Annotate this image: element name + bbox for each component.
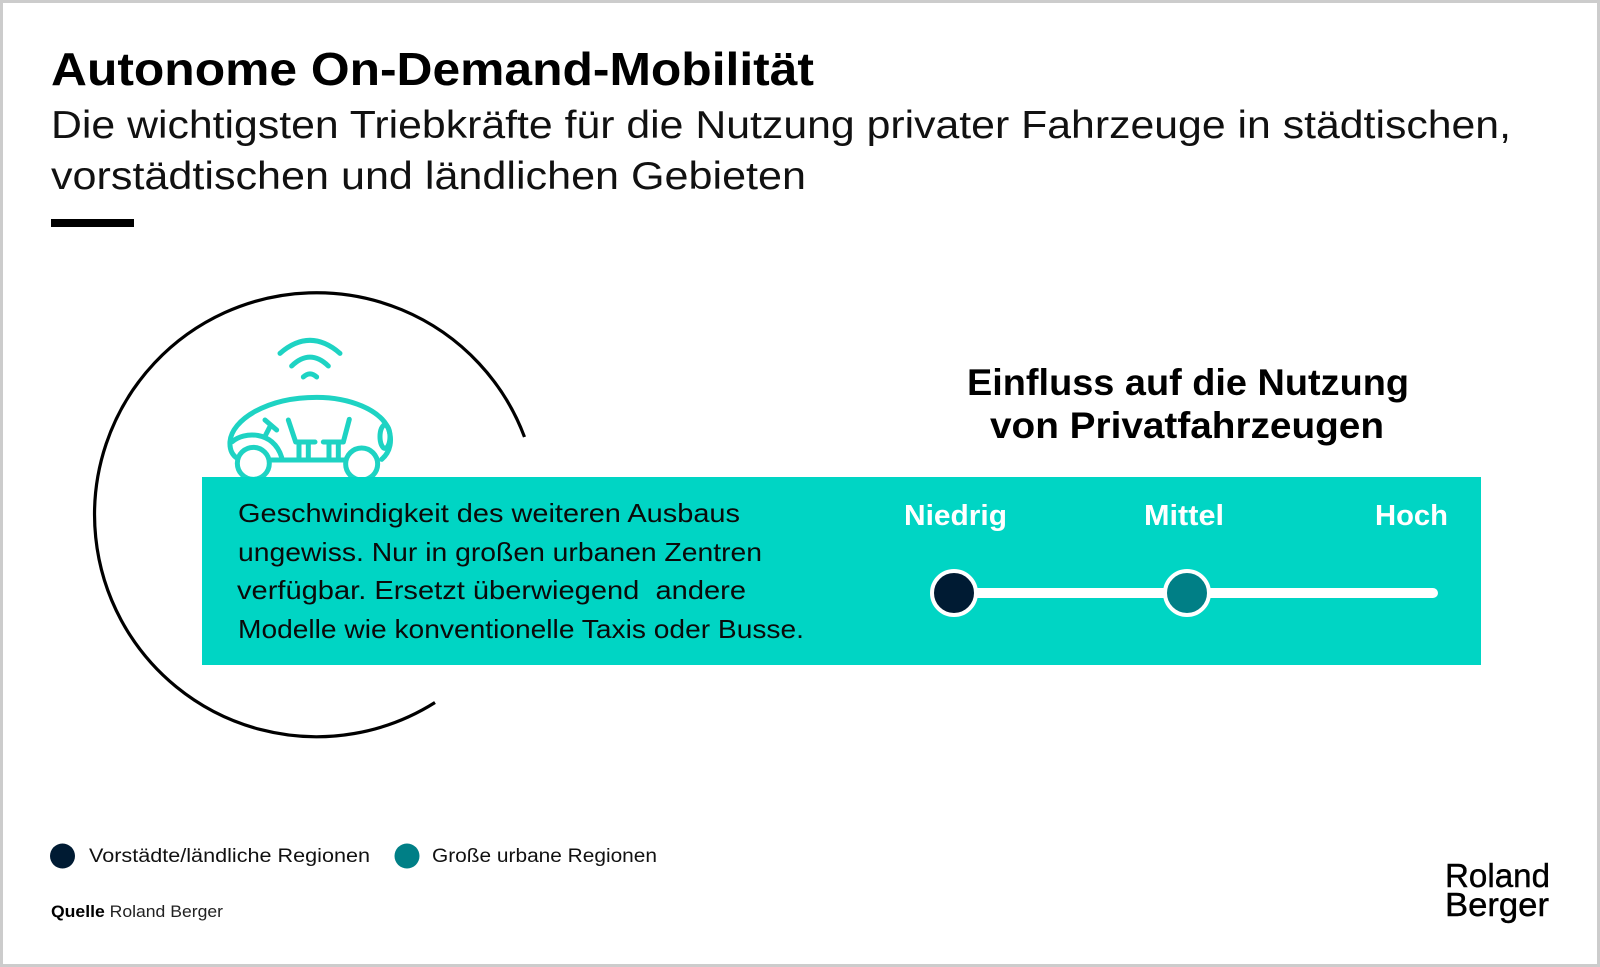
scale labels: Niedrig: [904, 500, 1007, 532]
source note: Quelle Roland Berger: [51, 902, 223, 921]
title: Autonome On-Demand-Mobilität: [51, 43, 814, 95]
legend: Große urbane Regionen: [432, 846, 657, 867]
title rule: [51, 219, 134, 227]
logo: Roland Berger: [1445, 857, 1550, 923]
circle outline: [95, 293, 525, 737]
heading: influence: [967, 362, 1409, 446]
scale labels: Mittel: [1144, 500, 1224, 532]
heading: influence: von Privatfahrzeugen: [990, 405, 1384, 446]
logo: Roland Berger: Roland: [1445, 857, 1550, 894]
scale labels: [904, 500, 1448, 532]
scale labels: Hoch: [1375, 500, 1448, 532]
legend: Vorstädte/ländliche Regionen: [89, 846, 370, 867]
subtitle: vorstädtischen und ländlichen Gebieten: [51, 155, 806, 198]
legend: [50, 844, 657, 868]
subtitle: Die wichtigsten Triebkräfte für die Nutzung privater Fahrzeuge in städtischen,: [51, 104, 1511, 147]
subtitle: [51, 104, 1511, 198]
panel: teal band: [202, 477, 1481, 665]
heading: influence: Einfluss auf die Nutzung: [967, 362, 1409, 403]
description text: Modelle wie konventionelle Taxis oder Busse.: [238, 614, 804, 644]
icon: autonomous car with wifi signal: [230, 340, 391, 480]
description text: Geschwindigkeit des weiteren Ausbaus: [238, 498, 740, 528]
description text: ungewiss. Nur in großen urbanen Zentren: [238, 537, 762, 567]
scale track with markers: [932, 571, 1433, 615]
description text: [237, 498, 804, 644]
logo: Roland Berger: Berger: [1445, 886, 1549, 923]
description text: verfügbar. Ersetzt überwiegend andere: [237, 575, 746, 605]
